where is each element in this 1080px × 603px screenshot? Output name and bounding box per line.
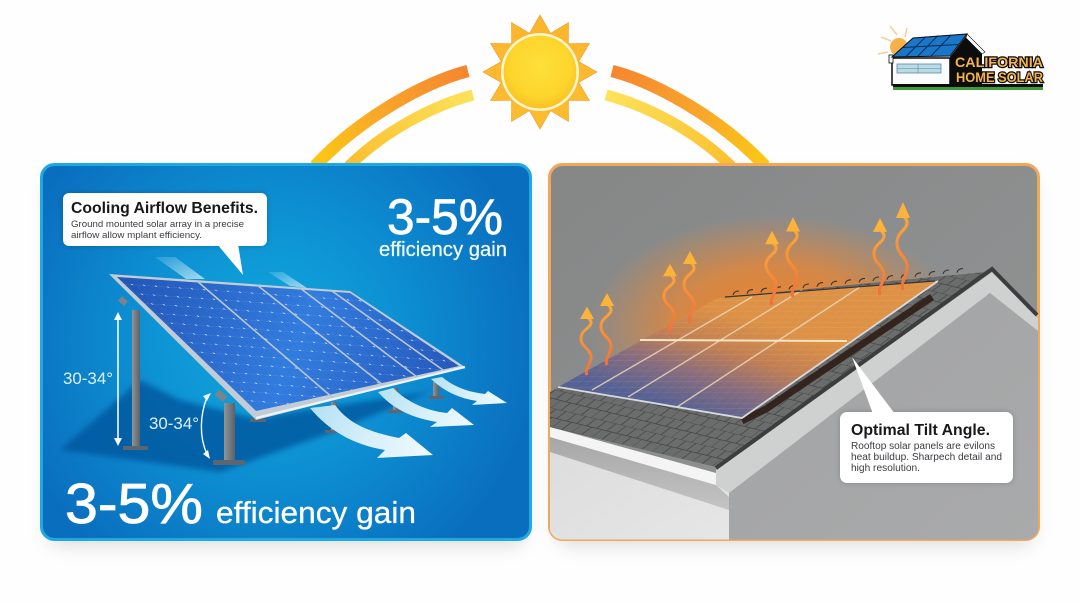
gap shadow (742, 297, 932, 421)
airflow streak top right (268, 272, 307, 288)
front left post (118, 296, 148, 450)
airflow arrow 1 (310, 405, 433, 458)
logo: California Home Solar (878, 26, 1043, 90)
logo text line 2: HOME SOLAR (956, 70, 1043, 85)
callout text: Ground mounted solar array in a precise (71, 219, 244, 230)
right gable wall (729, 293, 1038, 540)
roof shingles (550, 272, 985, 467)
heat arrow 3 (663, 264, 677, 333)
heat glow (600, 221, 942, 396)
roof edge (716, 269, 1037, 468)
callout text: high resolution. (851, 463, 920, 474)
callout: optimal tilt angle (840, 357, 1013, 483)
heat arrow 8 (896, 202, 910, 290)
solar array (109, 274, 465, 420)
stat: top right 3-5%: 3-5% (387, 189, 503, 245)
sun rays arcs right (606, 71, 765, 167)
roof panel dividers (592, 287, 860, 407)
fascia (550, 427, 716, 485)
label: tilt angle: 30-34° (149, 415, 199, 433)
icon: logo sun (878, 26, 908, 56)
ground shadow (60, 380, 430, 472)
heat arrow 4 (683, 251, 697, 323)
heat arrow 1 (580, 307, 594, 375)
airflow streak top left (155, 257, 205, 279)
stat label: top right efficiency gain: efficiency gain (379, 238, 507, 261)
logo roof solar panels (892, 34, 967, 57)
panel shadows (48, 176, 1034, 546)
icon: sun (483, 15, 597, 129)
logo text: CALIFORNIA (955, 55, 1043, 70)
callout: cooling airflow benefits (63, 193, 267, 275)
heat arrow 2 (600, 293, 614, 365)
callout text: heat buildup. Sharpech detail and (851, 452, 1002, 463)
curved tilt arrow (201, 393, 211, 459)
airflow arrow 3 (431, 377, 507, 405)
logo house body (893, 35, 982, 85)
callout title: Cooling Airflow Benefits. (71, 200, 258, 217)
airflow arrow 2 (378, 388, 474, 427)
stat: bottom 3-5%: 3-5% (65, 472, 203, 536)
wall eave shadow (550, 437, 729, 510)
stat label: bottom efficiency gain: efficiency gain (216, 495, 416, 530)
left wall (550, 432, 729, 540)
front right post (213, 389, 245, 465)
heat arrow 7 (873, 218, 887, 295)
ridge clips (725, 281, 935, 297)
panel: ground mounted airflow (42, 164, 530, 540)
callout title: Optimal Tilt Angle. (851, 422, 990, 439)
heat arrow 6 (786, 217, 800, 297)
rear support posts (250, 382, 444, 433)
logo ground line (893, 87, 1043, 90)
callout text: airflow allow mplant efficiency. (71, 230, 202, 241)
sun rays arcs left (315, 71, 473, 167)
heat arrow 5 (765, 231, 779, 305)
panel: rooftop heat (550, 164, 1038, 540)
label: height angle: 30-34° (63, 370, 113, 388)
height arrow (114, 312, 122, 446)
logo window (897, 64, 941, 73)
panel dividers (197, 281, 443, 398)
ridge hooks (733, 269, 963, 295)
gable trim (716, 272, 1038, 493)
callout text: Rooftop solar panels are evilons (851, 441, 995, 452)
rooftop solar array (558, 281, 938, 418)
